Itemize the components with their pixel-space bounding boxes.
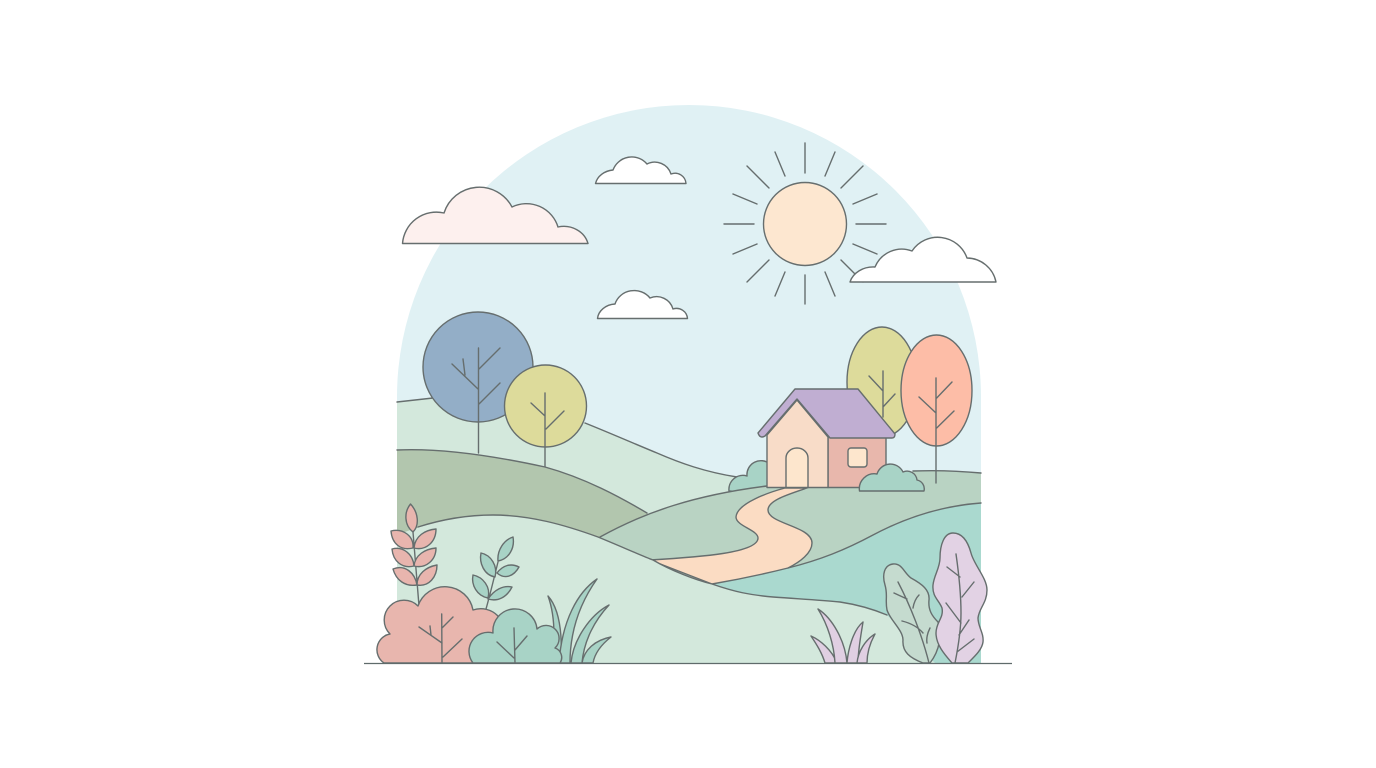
sun disc bbox=[764, 182, 846, 266]
grass: purple blades bbox=[811, 609, 875, 663]
teal hill bbox=[712, 503, 981, 663]
tree: olive oval behind house bbox=[847, 327, 917, 437]
door bbox=[786, 448, 808, 488]
ground line bbox=[364, 662, 1012, 664]
plant: teal leafy stem bbox=[473, 537, 519, 609]
far hill bbox=[397, 397, 800, 663]
house side wall bbox=[828, 437, 886, 488]
cloud: small lower bbox=[598, 291, 688, 318]
roof bbox=[758, 389, 895, 438]
bush: teal foreground bbox=[469, 609, 562, 663]
sun rays bbox=[724, 143, 886, 304]
cloud: right by the sun bbox=[850, 237, 996, 282]
leaf: green large bbox=[884, 564, 940, 663]
sky arch bbox=[397, 105, 981, 663]
window bbox=[848, 448, 867, 467]
grass: teal blades bbox=[548, 579, 611, 663]
plant: pink leafy stem bbox=[391, 504, 437, 606]
tree: peach oval bbox=[901, 335, 972, 483]
front hill bbox=[397, 515, 935, 663]
middle hill bbox=[600, 471, 981, 640]
dark green hill bbox=[397, 450, 680, 663]
house front wall bbox=[767, 400, 828, 488]
winding path bbox=[650, 488, 812, 584]
tree: blue round bbox=[423, 312, 533, 453]
bush right of house bbox=[859, 464, 924, 491]
house bbox=[758, 389, 895, 488]
tree: yellow round bbox=[504, 365, 586, 467]
cloud: large pink bbox=[402, 187, 588, 244]
teal hill outline bbox=[788, 503, 981, 568]
sun bbox=[724, 143, 886, 304]
bush: pink foreground bbox=[377, 587, 498, 663]
bush behind house bbox=[729, 461, 775, 495]
cloud: small top bbox=[596, 157, 686, 184]
leaf: purple tall bbox=[933, 533, 987, 663]
